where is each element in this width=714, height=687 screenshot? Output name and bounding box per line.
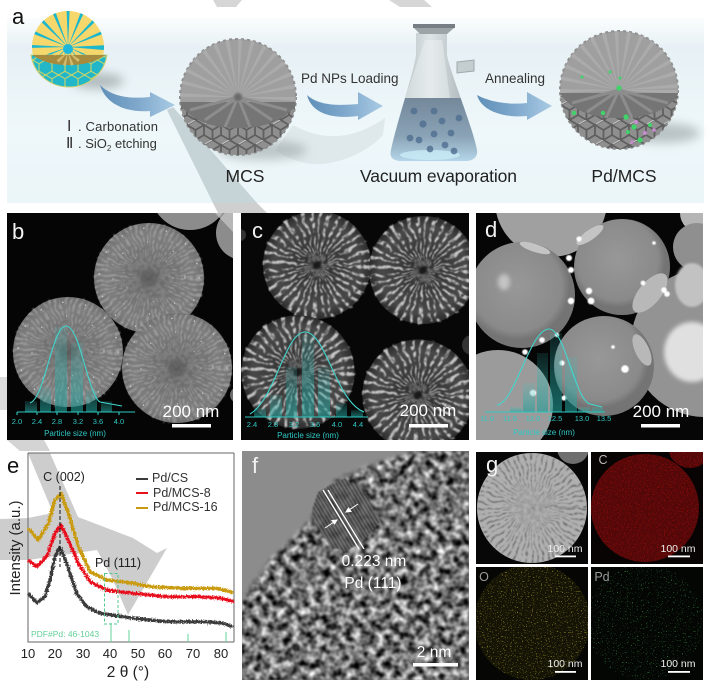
- text: PDF reference: PDF#Pd: 46-1043: [31, 629, 99, 639]
- label a: a: [12, 4, 25, 29]
- text: process steps: 2: [107, 144, 112, 153]
- histogram d: 12.5: [548, 414, 562, 423]
- label b: b: [12, 219, 24, 244]
- histogram d: 12.0: [526, 414, 540, 423]
- panel e: XRD chart: [0, 453, 234, 681]
- histogram d: 11.0: [480, 414, 494, 423]
- scale bar d: 200 nm: [633, 402, 689, 421]
- legend: Pd/CS: [152, 471, 188, 485]
- peak labels: [43, 470, 141, 570]
- histogram c: 3.2: [289, 420, 299, 429]
- curve Pd/MCS-8: [28, 525, 233, 602]
- text: lattice spacing: 0.223 nm: [342, 553, 406, 570]
- scale bar d: [633, 406, 688, 428]
- histogram c: 2.8: [268, 420, 278, 429]
- scale bar b: 200 nm: [163, 402, 219, 421]
- label c: c: [252, 218, 263, 243]
- histogram d: 13.5: [597, 414, 611, 423]
- panel g: carbon map: [591, 452, 703, 564]
- y axis title: Intensity (a.u.): [7, 500, 24, 596]
- x tick labels: 40: [103, 646, 117, 661]
- panel f: HRTEM image: [238, 447, 469, 680]
- x tick labels: 30: [76, 646, 90, 661]
- panel g: palladium map: [591, 567, 703, 680]
- label C: C: [598, 453, 608, 467]
- histogram b: 2.0: [12, 417, 22, 426]
- scale bar f: 2 nm: [417, 644, 451, 661]
- label g: g: [486, 452, 498, 477]
- histogram c: 4.0: [332, 420, 342, 429]
- histogram c: 3.6: [310, 420, 320, 429]
- text: lattice spacing: Pd (111): [344, 575, 402, 592]
- text: Annealing: Annealing: [485, 71, 545, 86]
- peak labels: Pd (111): [95, 556, 141, 570]
- label Pd: Pd: [594, 570, 610, 584]
- scale bar c: [400, 404, 456, 428]
- x tick labels: 60: [158, 646, 172, 661]
- histogram b: 2.4: [32, 417, 42, 426]
- histogram d: [480, 329, 611, 437]
- text: process steps: Ⅱ: [66, 136, 73, 152]
- legend: Pd/MCS-8: [153, 486, 211, 500]
- histogram c: Particle size (nm): [277, 431, 339, 440]
- arrow 2: [307, 92, 383, 120]
- histogram d: Particle size (nm): [513, 428, 575, 437]
- arrow 1: [100, 85, 175, 117]
- histogram d: 11.5: [503, 414, 517, 423]
- particles in liquid: [407, 108, 462, 154]
- label: Vacuum evaporation: Vacuum evaporation: [360, 166, 517, 186]
- label f: f: [252, 453, 259, 478]
- x tick labels: [21, 646, 228, 661]
- label O: O: [479, 570, 489, 584]
- arrow 3: [477, 92, 552, 120]
- text: Pd NPs Loading: Pd NPs Loading: [301, 71, 399, 86]
- scale g1: 100 nm: [547, 543, 583, 555]
- x tick labels: 50: [131, 646, 145, 661]
- spheres b: [12, 213, 233, 424]
- reference lines: [60, 486, 226, 642]
- text: process steps: [66, 119, 158, 153]
- scale bar b: [164, 406, 218, 428]
- histogram c: 2.4: [247, 420, 257, 429]
- text: lattice spacing: [342, 553, 406, 592]
- panel a: synthesis schematic: [7, 4, 704, 203]
- label: MCS: MCS: [226, 166, 264, 186]
- histogram c: 4.4: [353, 420, 363, 429]
- histogram b: 3.2: [73, 417, 83, 426]
- axes: [28, 453, 234, 642]
- panel g: HAADF image: [476, 452, 588, 564]
- x tick labels: 80: [214, 646, 228, 661]
- scale g2: 100 nm: [660, 543, 696, 555]
- watermark inside schematic: [167, 107, 385, 203]
- MCS sphere: [175, 39, 307, 163]
- label e: e: [7, 453, 19, 478]
- legend: Pd/MCS-16: [153, 500, 218, 514]
- text: process steps: Ⅰ: [67, 119, 71, 135]
- scale g4: 100 nm: [660, 658, 696, 670]
- text: process steps: . Carbonation: [78, 119, 158, 134]
- bright particles: [522, 236, 670, 401]
- x tick labels: 70: [186, 646, 200, 661]
- watermark inside chart: [0, 453, 167, 615]
- panel b: STEM image: [7, 213, 233, 440]
- scale bar f: [413, 644, 458, 666]
- scale bar c: 200 nm: [400, 401, 456, 420]
- amorphous vacuum region: [242, 451, 414, 603]
- curve Pd/MCS-16: [28, 493, 233, 593]
- panel c: STEM image: [241, 213, 469, 440]
- histogram b: [12, 326, 135, 438]
- x axis title: 2 θ (°): [107, 664, 149, 681]
- x tick labels: 20: [48, 646, 62, 661]
- histogram c: [245, 332, 368, 440]
- background watermark: [0, 0, 432, 451]
- text: process steps: etching: [111, 136, 157, 151]
- scale g3: 100 nm: [547, 658, 583, 670]
- template sphere icon: [31, 11, 124, 89]
- spheres c: [241, 213, 469, 440]
- histogram b: 2.8: [52, 417, 62, 426]
- spheres d: [476, 213, 703, 440]
- x tick labels: 10: [21, 646, 35, 661]
- legend: [136, 471, 218, 514]
- curve Pd/CS: [28, 547, 233, 627]
- label d: d: [485, 217, 497, 242]
- peak labels: C (002): [43, 470, 85, 484]
- histogram d: 13.0: [575, 414, 589, 423]
- histogram b: 4.0: [114, 417, 124, 426]
- lattice spacing marker: [323, 490, 364, 549]
- flask: [390, 24, 478, 161]
- panel g: oxygen map: [476, 567, 588, 680]
- Pd nanoparticle lattice: [312, 478, 380, 552]
- label: Pd/MCS: Pd/MCS: [591, 166, 657, 186]
- histogram b: 3.6: [93, 417, 103, 426]
- XRD curves: [28, 493, 233, 627]
- panel d: STEM image: [476, 213, 703, 440]
- Pd/MCS sphere: [558, 31, 700, 156]
- text: process steps: . SiO: [78, 136, 107, 151]
- histogram b: Particle size (nm): [44, 429, 106, 438]
